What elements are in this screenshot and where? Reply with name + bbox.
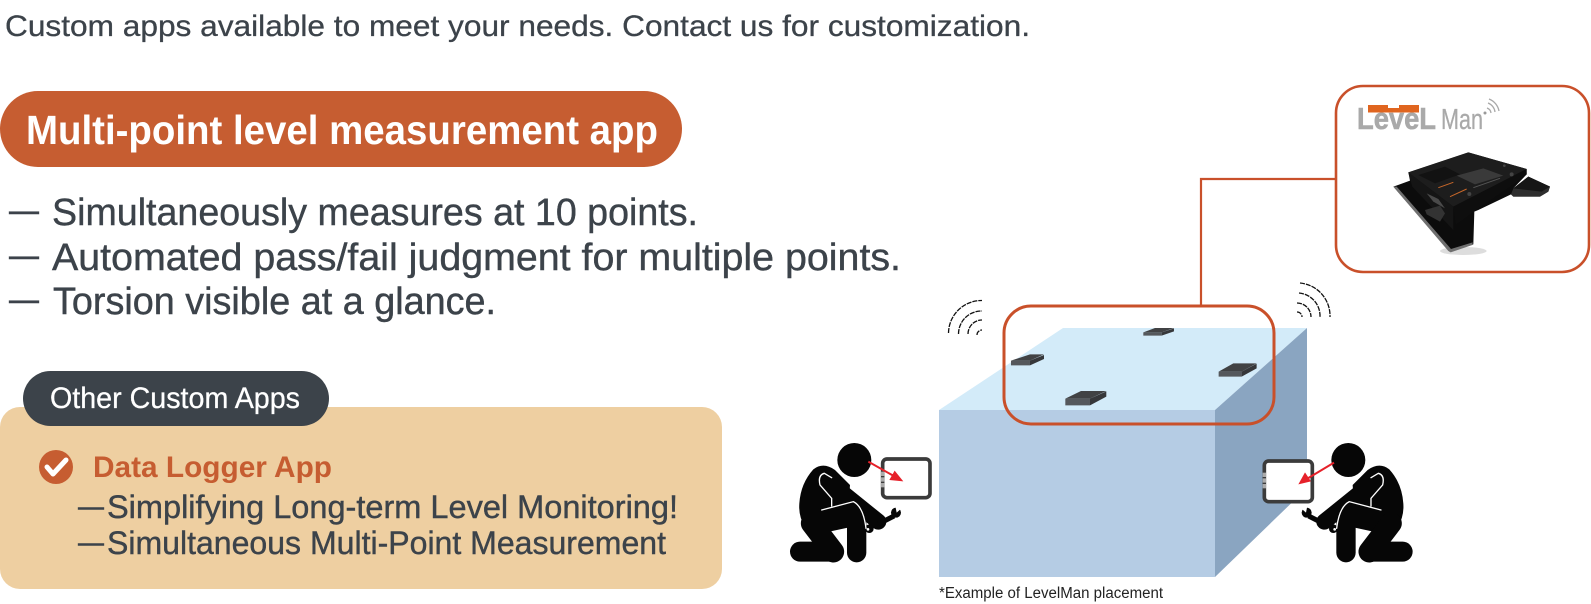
icon: left wireless signal [948,300,982,335]
feature list: Torsion visible at a glance. [53,281,496,323]
data logger features: — [78,490,104,523]
data logger features: Simultaneous Multi-Point Measurement [107,525,666,561]
title pill: multi-point level measurement app: Multi-point level measurement app [26,107,658,153]
worker with tablet, left [799,443,930,553]
block with sensors [939,328,1307,577]
data logger features: — [78,526,104,559]
arrow, left [868,462,903,481]
LevelMan logo [1357,99,1499,136]
worker with tablet, right [1263,443,1403,553]
feature list: Simultaneously measures at 10 points. [52,192,698,234]
arrow, right [1298,463,1334,484]
callout: LevelMan device [1336,86,1589,272]
sensors on block [1011,328,1257,405]
feature list: Automated pass/fail judgment for multiple points. [52,237,901,279]
icon: right wireless signal [1297,283,1330,317]
footnote: *Example of LevelMan placement [939,585,1164,602]
data logger features: Simplifying Long-term Level Monitoring! [107,489,678,525]
panel tab: other custom apps [23,371,329,426]
highlight frame and connector [1004,179,1336,424]
icon: check mark [39,450,73,484]
panel: other custom apps [0,371,722,589]
LevelMan logo: Man [1441,104,1483,136]
intro heading: Custom apps available to meet your needs. Contact us for customization. [5,10,1030,43]
LevelMan device photo [1393,152,1550,255]
tablet, right [1263,461,1312,502]
feature list: — [9,278,39,319]
title pill: multi-point level measurement app [0,91,682,167]
feature list: — [9,234,39,275]
tablet, left [881,459,930,498]
data logger app heading: Data Logger App [93,451,332,484]
LevelMan logo: LeveL [1357,101,1436,136]
data logger features [78,489,678,561]
feature list: — [9,189,39,230]
feature list [9,189,901,323]
panel tab: other custom apps: Other Custom Apps [50,382,300,415]
